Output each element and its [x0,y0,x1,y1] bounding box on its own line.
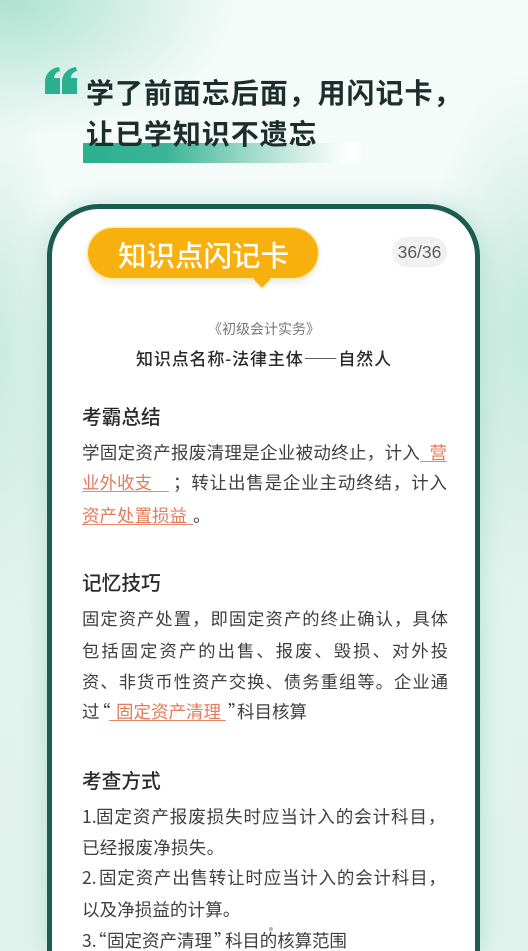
text: memory tips body: 包括固定资产的出售、报废、毁损、对外投 [82,637,448,662]
text: exam summary body [82,440,447,528]
heading: exam summary: 考霸总结 [82,401,161,430]
badge: flash card speech bubble [86,226,320,290]
text: exam style body [82,804,447,951]
text: memory tips body: 过 [82,699,100,724]
text: exam summary body: ；转让出售是企业主动终结，计入 [173,470,447,495]
section: exam style [82,765,447,951]
text: memory tips body: ” [228,699,246,724]
text: memory tips body: 科目核算 [237,699,307,724]
section: memory tips [82,567,448,724]
text: exam summary body: 资产处置损益 [82,503,187,528]
small grey dot [269,927,273,931]
text: exam summary body: 学固定资产报废清理是企业被动终止，计入 [82,440,420,465]
text: exam style body: 固定资产出售转让时应当计入的会计科目， [99,865,447,890]
text: exam style body: 固定资产报废损失时应当计入的会计科目， [96,804,446,829]
title: 学了前面忘后面，用闪记卡， [86,72,462,112]
text: exam style body: 已经报废净损失。 [82,835,224,860]
text: exam style body: 以及净损益的计算。 [82,897,240,922]
text: memory tips body: “ [93,699,110,724]
text: memory tips body: 固定资产处置，即固定资产的终止确认，具体 [82,605,448,630]
book name: 《初级会计实务》 [208,319,320,339]
text: memory tips body [82,605,448,724]
text: exam summary body: 营 [430,440,447,465]
text: exam style body: 1. [82,804,97,829]
title [86,72,462,153]
section: exam summary [82,401,447,528]
knowledge point name: 知识点名称-法律主体——自然人 [136,345,392,370]
heading: memory tips: 记忆技巧 [82,567,161,596]
heading: exam style: 考查方式 [82,765,161,794]
text: memory tips body: 固定资产清理 [116,699,221,724]
badge: flash card speech bubble: 知识点闪记卡 [118,234,289,275]
panel: flash card [47,204,480,951]
title: 让已学知识不遗忘 [86,113,318,153]
page counter [392,237,447,267]
text: exam style body: 2. [82,865,97,890]
text: exam summary body: 。 [193,503,210,528]
page counter: 36/36 [398,242,441,262]
text: exam summary body: 业外收支 [82,470,152,495]
icon: quote mark [45,67,77,94]
text: memory tips body: 资、非货币性资产交换、债务重组等。企业通 [82,668,448,693]
highlight bar under title [83,143,362,163]
